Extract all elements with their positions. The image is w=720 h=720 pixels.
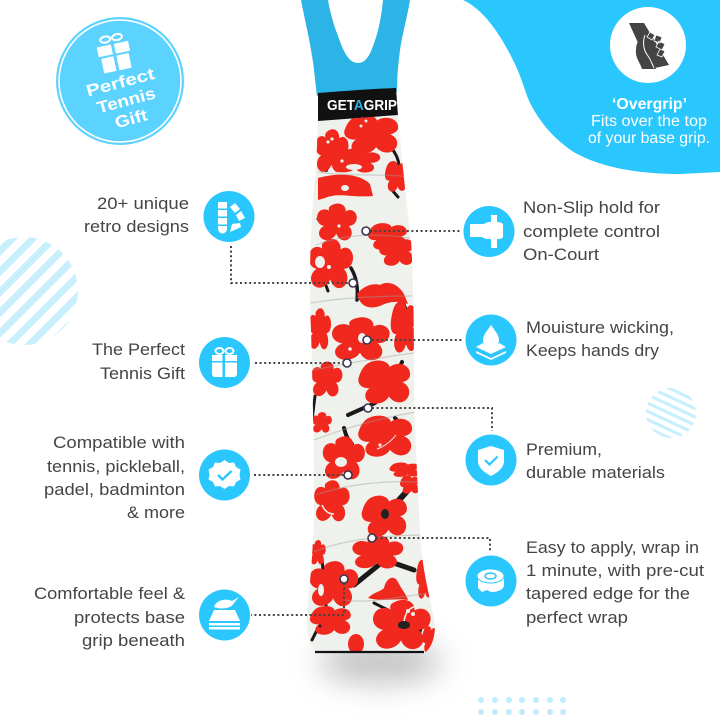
feature: easy to apply: tapered edge for the — [526, 584, 690, 603]
overgrip text: ‘Overgrip’ — [612, 96, 687, 113]
decorative striped circle right — [646, 388, 696, 438]
badge: perfect tennis gift — [56, 17, 184, 145]
overgrip text: of your base grip. — [588, 130, 710, 147]
feature: non-slip hold: Non-Slip hold for — [523, 198, 660, 217]
feature: 20+ unique retro designs: 20+ unique — [97, 194, 189, 213]
grip ground shadow — [318, 640, 442, 684]
connector nodes — [340, 227, 376, 583]
feature: comfortable feel: protects base — [74, 608, 185, 627]
icon: gift — [212, 348, 237, 377]
badge text: Gift — [113, 106, 150, 132]
icon: check badge — [208, 460, 240, 489]
icon: gift box — [95, 32, 134, 74]
feature: comfortable feel: Comfortable feel & — [34, 584, 186, 603]
badge text: Perfect — [84, 65, 157, 101]
grip wrap with red floral pattern — [307, 115, 435, 653]
feature: moisture wicking — [466, 314, 674, 366]
racket handle and grip — [300, 0, 442, 684]
icon: tape roll — [477, 569, 504, 592]
feature: compatible sports: tennis, pickleball, — [47, 457, 185, 476]
feature: easy to apply — [466, 538, 704, 627]
decorative dot grid — [478, 697, 566, 715]
black band with brand: GETAGRIP — [327, 98, 397, 114]
feature: non-slip hold: complete control — [523, 222, 660, 241]
feature: premium durable: Premium, — [526, 440, 602, 459]
icon: hand holding handle — [470, 215, 503, 248]
feature: moisture wicking: Keeps hands dry — [526, 341, 660, 360]
feature: premium durable — [466, 434, 665, 486]
racket throat — [301, 0, 410, 96]
icon: hand gripping overgrip — [629, 23, 669, 69]
feature: moisture wicking: Mouisture wicking, — [526, 318, 674, 337]
top-right blue blob — [463, 0, 720, 174]
feature: 20+ unique retro designs — [84, 191, 254, 242]
feature: the perfect tennis gift: Tennis Gift — [100, 364, 185, 383]
feature: non-slip hold: On-Court — [523, 245, 599, 264]
feature: compatible sports: & more — [127, 503, 185, 522]
feature: the perfect tennis gift: The Perfect — [92, 340, 185, 359]
feature: the perfect tennis gift — [92, 337, 250, 388]
flower centre marks — [315, 120, 415, 622]
grip bottom edge — [315, 651, 424, 653]
wrap band edges — [311, 172, 425, 601]
overgrip icon circle — [610, 7, 686, 83]
overgrip text — [588, 96, 710, 147]
icon: feather on cushion — [209, 597, 240, 630]
overgrip text: Fits over the top — [591, 113, 707, 130]
feature: comfortable feel — [34, 584, 250, 650]
feature: compatible sports: Compatible with — [53, 433, 185, 452]
feature: easy to apply: 1 minute, with pre-cut — [526, 561, 704, 580]
red flowers — [309, 115, 437, 654]
feature: easy to apply: perfect wrap — [526, 608, 628, 627]
feature: premium durable: durable materials — [526, 463, 665, 482]
feature: easy to apply: Easy to apply, wrap in — [526, 538, 699, 557]
icon: colour swatch — [218, 202, 245, 234]
decorative striped circle left — [0, 237, 78, 345]
connector lines — [231, 231, 492, 615]
feature: comfortable feel: grip beneath — [82, 631, 185, 650]
feature: 20+ unique retro designs: retro designs — [84, 217, 189, 236]
icon: water drop on layers — [476, 325, 506, 360]
badge text — [84, 65, 167, 137]
badge text: Tennis — [95, 84, 158, 117]
black stems — [312, 130, 422, 640]
icon: shield check — [478, 446, 504, 476]
feature: compatible sports — [44, 433, 250, 522]
black band with brand — [318, 88, 398, 122]
feature: non-slip hold — [464, 198, 660, 264]
feature: compatible sports: padel, badminton — [44, 480, 185, 499]
